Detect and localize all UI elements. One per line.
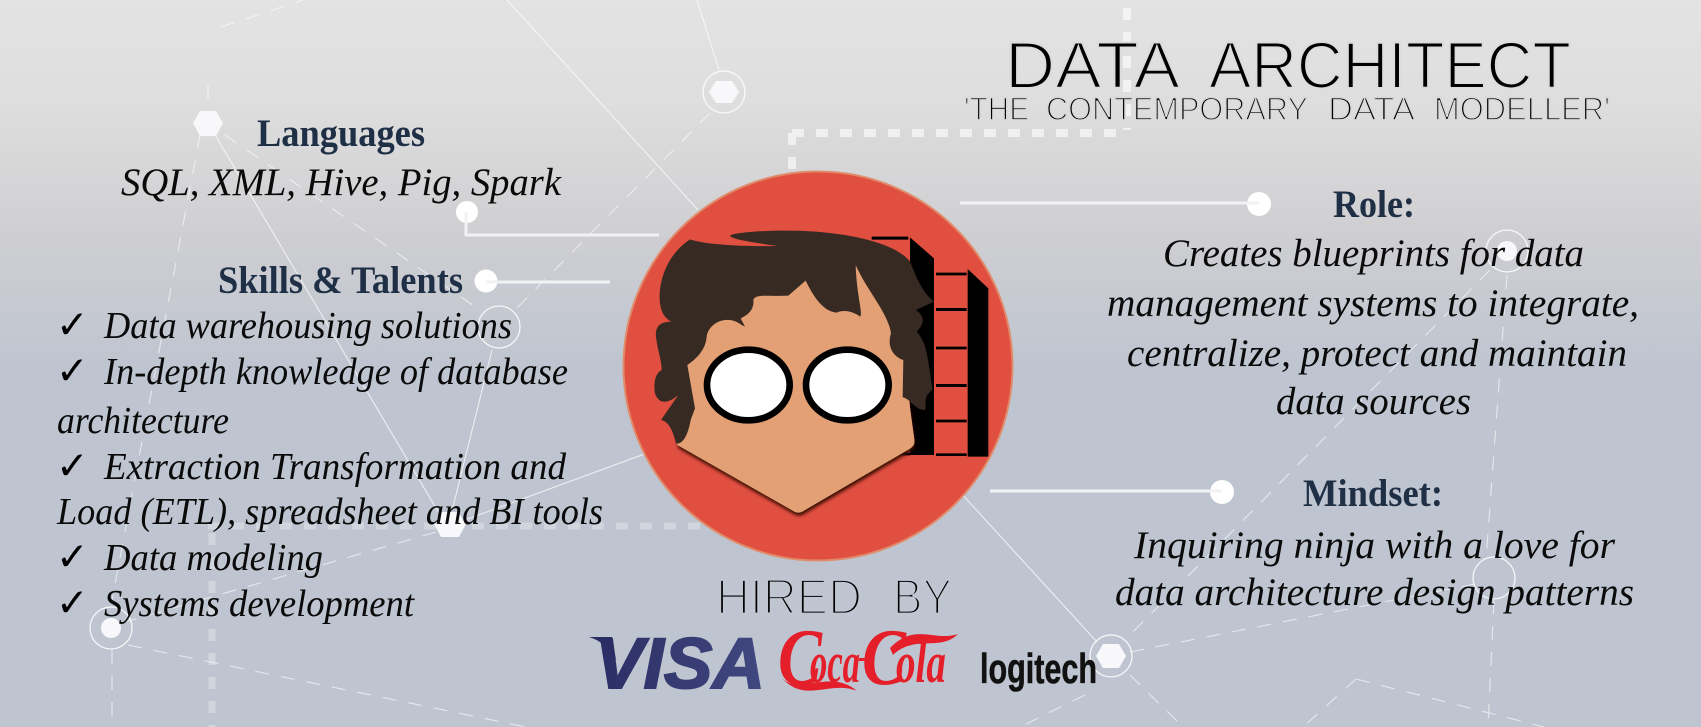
hair <box>654 231 934 443</box>
connector: role <box>960 192 1271 216</box>
panel: skills and talents <box>56 259 603 626</box>
title: ARCHITECT <box>1209 28 1571 102</box>
red circle <box>624 172 1012 560</box>
logo: visa: VISA <box>595 625 765 704</box>
role description: Creates blueprints for data <box>1163 232 1584 275</box>
role description: data sources <box>1276 380 1471 423</box>
subtitle: CONTEMPORARY <box>1046 91 1308 127</box>
panel: mindset <box>1115 472 1634 614</box>
logo: coca-cola: ola <box>896 630 946 695</box>
heading: Mindset: <box>1303 472 1443 515</box>
connector: languages <box>456 201 659 235</box>
heading: Role: <box>1333 183 1415 226</box>
role description <box>1107 232 1639 423</box>
role description: management systems to integrate, <box>1107 282 1639 325</box>
connector: skills <box>474 270 610 292</box>
logo: logitech: logitech <box>980 645 1097 692</box>
title <box>1005 28 1571 102</box>
skills list: Load (ETL), spreadsheet and BI tools <box>56 491 603 533</box>
hired by heading <box>716 569 952 625</box>
heading: Skills & Talents <box>218 259 463 302</box>
bookshelf <box>872 237 988 457</box>
mindset description <box>1115 524 1634 614</box>
subtitle: MODELLER' <box>1434 91 1610 127</box>
skills list: ✓ <box>56 535 89 580</box>
skills list: Data warehousing solutions <box>103 305 512 347</box>
subtitle: 'THE <box>964 91 1029 127</box>
panel: languages <box>121 112 562 204</box>
skills list <box>56 303 603 626</box>
languages list: SQL, XML, Hive, Pig, Spark <box>121 161 562 204</box>
logo: coca-cola: oca <box>810 630 860 695</box>
skills list: ✓ <box>56 303 89 348</box>
skills list: ✓ <box>56 444 89 489</box>
character portrait <box>654 231 988 513</box>
face <box>677 260 914 513</box>
heading: Languages <box>257 112 425 155</box>
skills list: architecture <box>57 400 229 442</box>
role description: centralize, protect and maintain <box>1127 332 1627 375</box>
hired by heading: HIRED <box>716 569 862 625</box>
panel: role <box>1107 183 1639 423</box>
skills list: Systems development <box>104 583 415 625</box>
logo: coca-cola: - <box>858 636 868 676</box>
portrait badge <box>624 172 1012 560</box>
subtitle <box>964 91 1610 127</box>
logo: coca-cola <box>778 614 958 702</box>
title: DATA <box>1005 28 1180 102</box>
logo: coca-cola: C <box>778 614 823 702</box>
skills list: ✓ <box>56 581 89 626</box>
skills list: In-depth knowledge of database <box>103 351 568 393</box>
skills list: ✓ <box>56 349 89 394</box>
skills list: Data modeling <box>103 537 323 579</box>
mindset description: Inquiring ninja with a love for <box>1133 524 1616 567</box>
skills list: Extraction Transformation and <box>103 446 567 488</box>
logo: coca-cola: C <box>862 614 907 702</box>
logos <box>589 614 1097 704</box>
glasses <box>707 350 889 420</box>
subtitle: DATA <box>1328 91 1416 127</box>
connector: mindset <box>990 480 1234 504</box>
hired by heading: BY <box>893 569 952 625</box>
mindset description: data architecture design patterns <box>1115 571 1634 614</box>
